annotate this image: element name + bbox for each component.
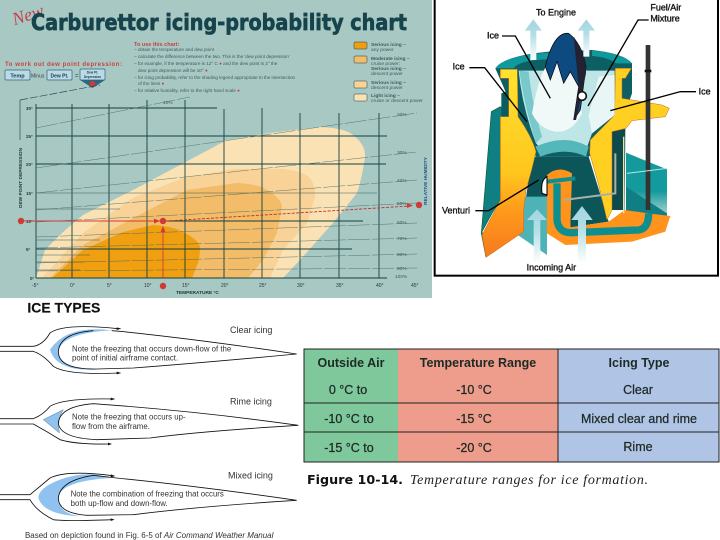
caption: figure 10-14: Temperature ranges for ice formation. [410, 473, 648, 488]
labels: carburettor parts: Ice [699, 87, 711, 97]
icon: carburettor body [481, 33, 670, 257]
right scale: relative humidity: 90% [397, 266, 407, 272]
labels: carburettor parts: Ice [453, 61, 465, 71]
legend: icing severity: cruise or descent power [371, 98, 423, 104]
x axis: temperature: -5° [32, 283, 38, 289]
legend: icing severity: any power [371, 47, 394, 53]
diagram: clear icing: Clear icing [230, 325, 272, 335]
y axis: dew point depression: 5° [26, 247, 31, 252]
legend: icing severity: Serious icing – [371, 66, 406, 72]
diagram: mixed icing [0, 470, 297, 521]
instructions: to use this chart: dew point depression will be 10° ● [138, 68, 208, 73]
right scale: relative humidity: 30% [397, 150, 407, 156]
arrows: airflow up [525, 19, 595, 263]
table: temperature ranges for ice formation: -10 °C to [324, 412, 374, 426]
title: carburettor icing-probability chart [9, 0, 407, 36]
instructions: to use this chart [134, 42, 295, 93]
x axis: temperature: 30° [297, 283, 305, 289]
y axis: dew point depression: 25° [26, 134, 33, 139]
table: temperature ranges for ice formation: 0 °C to [329, 383, 367, 397]
lower throat [525, 157, 609, 227]
labels: carburettor parts: Mixture [650, 13, 680, 23]
x axis: temperature: 35° [336, 283, 344, 289]
x axis: temperature: 20° [221, 283, 229, 289]
x axis: temperature: 10° [144, 283, 152, 289]
dew point depression formula [5, 62, 122, 88]
labels: carburettor parts: Ice [487, 30, 499, 40]
float chamber [626, 153, 667, 217]
chart: icing probability zones [36, 127, 365, 278]
x axis: temperature: 40° [376, 283, 384, 289]
table: temperature ranges for ice formation: Icing Type [609, 356, 669, 370]
table: temperature ranges for ice formation: -15 °C to [324, 441, 374, 455]
legend: icing severity: Serious icing – [371, 42, 406, 48]
table: temperature ranges for ice formation: Temperature Range [420, 356, 536, 370]
diagram: rime icing: Rime icing [230, 396, 272, 406]
legend: icing severity: Serious icing – [371, 80, 406, 86]
diagram: mixed icing: Mixed icing [228, 470, 273, 480]
y axis: dew point depression: 30° [26, 106, 33, 111]
table: temperature ranges for ice formation [304, 349, 719, 462]
caption: figure 10-14: Figure 10-14. [307, 473, 403, 487]
panel: ice types [0, 300, 298, 540]
y axis: dew point depression: 20° [26, 162, 33, 167]
instructions: to use this chart: – obtain the temperature and dew point [134, 47, 215, 52]
legend: icing severity: descent power [371, 71, 403, 77]
dew point depression formula: Dew Pt. [87, 70, 98, 74]
instructions: to use this chart: of the lines ● [138, 81, 164, 86]
diagram: rime icing: Note the freezing that occurs up- [72, 413, 186, 422]
diagram: mixed icing: both up-flow and down-flow. [71, 499, 168, 508]
caption: figure 10-14 [307, 473, 648, 488]
table: temperature ranges for ice formation: -10 °C [456, 383, 492, 397]
legend: icing severity: cruise power; [371, 61, 400, 67]
instructions: to use this chart: – for relative humidity, refer to the right hand scale ● [134, 88, 240, 93]
leader lines [469, 20, 696, 211]
ice build-up [519, 71, 615, 150]
table: temperature ranges for ice formation: -15 °C [456, 412, 492, 426]
x axis: temperature: 25° [259, 283, 267, 289]
x axis: temperature: TEMPERATURE °C [176, 290, 219, 296]
panel: carburettor icing-probability chart [0, 0, 432, 298]
panel: carburettor cutaway diagram [435, 0, 718, 276]
diagram: rime icing: flow from the airframe. [72, 422, 150, 431]
table: temperature ranges for ice formation: -20 °C [456, 441, 492, 455]
right scale: relative humidity: 50% [397, 201, 407, 207]
right scale: relative humidity: 80% [397, 252, 407, 258]
labels: carburettor parts [442, 3, 711, 273]
labels: carburettor parts: Incoming Air [527, 263, 576, 273]
dew point depression formula: To work out dew point depression: [5, 62, 122, 68]
legend: icing severity [354, 42, 423, 104]
legend: icing severity: Light icing – [371, 93, 400, 99]
diagram: clear icing: Note the freezing that occurs down-flow of the [72, 344, 231, 353]
right scale: relative humidity: 100% [395, 274, 408, 280]
right scale: relative humidity: RELATIVE HUMIDITY [423, 156, 429, 205]
instructions: to use this chart: – calculate the difference between the two. This is the 'dew point depression' [134, 54, 290, 59]
incoming air passage [515, 197, 547, 255]
diagram: mixed icing: Note the combination of freezing that occurs [71, 490, 224, 499]
dew point depression formula: Dew Pt. [50, 74, 69, 80]
table: temperature ranges for ice formation: Rime [623, 440, 653, 454]
worked example: red arrows and markers [18, 202, 422, 289]
x axis: temperature [32, 283, 419, 296]
title: carburettor icing-probability chart: New [9, 0, 46, 29]
rod [641, 45, 655, 210]
heading: ice types: ICE TYPES [27, 300, 100, 316]
y axis: dew point depression: 0° [30, 276, 35, 281]
dew point depression formula: Temp [10, 74, 25, 80]
right scale: relative humidity: 60% [397, 220, 407, 226]
dew point depression formula: Depression [84, 75, 101, 79]
right scale: relative humidity [163, 100, 429, 280]
right scale: relative humidity: 40% [397, 178, 407, 184]
right wall [590, 68, 669, 220]
source note: Based on depiction found in Fig. 6-5 of Air Command Weather Manual [25, 531, 274, 540]
x axis: temperature: 45° [411, 283, 419, 289]
legend: icing severity: Moderate icing – [371, 56, 410, 62]
right scale: relative humidity: 10% [163, 100, 173, 106]
orange fuel well [547, 170, 670, 245]
labels: carburettor parts: To Engine [536, 7, 576, 17]
venturi lip [542, 177, 547, 195]
y axis: dew point depression: 15° [26, 191, 33, 196]
left wall [482, 69, 536, 257]
labels: carburettor parts: Venturi [442, 205, 470, 215]
y axis: dew point depression: DEW POINT DEPRESSION [18, 147, 24, 208]
dew point depression formula: Minus [31, 74, 45, 80]
right scale: relative humidity: 20% [397, 112, 407, 118]
legend: icing severity: descent power [371, 85, 403, 91]
throttle plate [545, 33, 586, 120]
y axis: dew point depression [18, 85, 100, 281]
table: temperature ranges for ice formation: Outside Air [318, 356, 385, 370]
chart grid and humidity lines [36, 97, 417, 278]
table: temperature ranges for ice formation: Clear [623, 383, 653, 397]
table: temperature ranges for ice formation: Mixed clear and rime [581, 412, 697, 426]
x axis: temperature: 15° [182, 283, 190, 289]
diagram: rime icing [0, 396, 298, 445]
right scale: relative humidity: 70% [397, 236, 407, 242]
upper back interior [495, 50, 632, 157]
diagram: clear icing: point of initial airframe contact. [72, 354, 178, 363]
x axis: temperature: 5° [107, 283, 112, 289]
dew point depression formula: = [75, 74, 79, 80]
instructions: to use this chart: – for example, if the temperature is 12° C ● and the dew point is 2° the [134, 61, 278, 66]
instructions: to use this chart: To use this chart: [134, 42, 180, 48]
labels: carburettor parts: Fuel/Air [650, 3, 681, 13]
title: carburettor icing-probability chart: Carburettor icing-probability chart [31, 11, 407, 36]
x axis: temperature: 0° [70, 283, 75, 289]
diagram: clear icing [0, 325, 297, 374]
y axis: dew point depression: 10° [26, 219, 33, 224]
instructions: to use this chart: – for icing probability, refer to the shading legend appropriate to the intersection [134, 75, 295, 80]
